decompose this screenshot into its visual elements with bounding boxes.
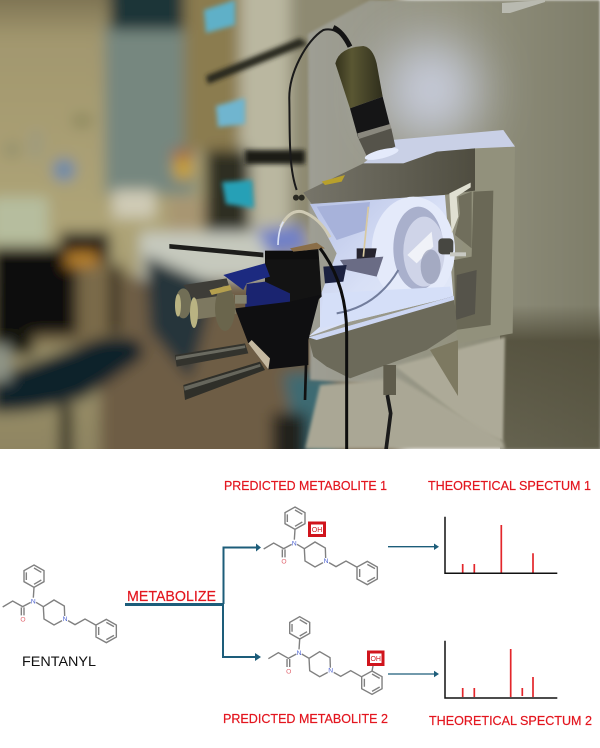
sticker on top of panel bbox=[502, 0, 545, 13]
molecule: predicted metabolite 1 bbox=[264, 507, 377, 585]
molecule: predicted metabolite 2 bbox=[268, 617, 382, 694]
molecule: fentanyl: O bbox=[20, 617, 26, 624]
molecule: predicted metabolite 2: N bbox=[328, 668, 333, 675]
heading: theoretical spectrum 1: THEORETICAL SPECTUM 1 bbox=[428, 479, 591, 493]
callout: OH group on metabolite 1 bbox=[310, 523, 324, 536]
callout: OH group on metabolite 2 bbox=[368, 652, 383, 664]
side latch and bracket bbox=[454, 191, 493, 330]
adjustment knobs bbox=[184, 278, 229, 299]
molecule: predicted metabolite 1: O bbox=[281, 559, 287, 566]
rods below stage bbox=[175, 343, 248, 367]
camera cable bbox=[289, 29, 350, 190]
arrow: metabolite 2 to spectrum 2 bbox=[388, 671, 439, 677]
arrow: metabolize branching to both metabolites bbox=[125, 544, 261, 661]
chart: theoretical spectrum 1 bbox=[445, 517, 557, 573]
housing back plate bbox=[458, 148, 513, 341]
molecule: predicted metabolite 1: N bbox=[292, 540, 297, 547]
molecule: fentanyl: N bbox=[31, 598, 36, 605]
heading: theoretical spectrum 2: THEORETICAL SPECTUM 2 bbox=[429, 714, 592, 728]
inlet rod bbox=[169, 244, 263, 257]
black positioning stage bbox=[265, 249, 322, 302]
molecule: fentanyl: N bbox=[63, 616, 68, 623]
connector under housing bbox=[383, 365, 396, 395]
ion source housing, drawn at 3x bbox=[169, 27, 515, 450]
molecule: fentanyl bbox=[3, 565, 116, 643]
inlet stage inside the window bbox=[356, 248, 377, 259]
lower housing bbox=[308, 296, 457, 378]
housing top hood bbox=[363, 130, 515, 163]
heading: predicted metabolite 2: PREDICTED METABOLITE 2 bbox=[223, 712, 388, 726]
viewing window interior bbox=[308, 195, 453, 337]
photo: mass spectrometer ion source with camera in a laboratory bbox=[0, 0, 600, 470]
molecule: predicted metabolite 2: O bbox=[286, 668, 291, 675]
molecule: predicted metabolite 2: N bbox=[297, 650, 302, 657]
instrument front panel bbox=[308, 0, 600, 449]
arrow: metabolite 1 to spectrum 1 bbox=[388, 544, 439, 550]
lower white panel below the source bbox=[395, 337, 505, 441]
USB microscope camera bbox=[335, 46, 400, 162]
callout: OH group on metabolite 1: OH bbox=[312, 527, 322, 534]
blurred instrument screens bbox=[204, 0, 308, 208]
label: metabolize: METABOLIZE bbox=[127, 589, 216, 605]
molecule: predicted metabolite 1: N bbox=[324, 558, 329, 565]
blurred laboratory background bbox=[0, 0, 400, 470]
chart: theoretical spectrum 2 bbox=[445, 641, 557, 698]
heading: predicted metabolite 1: PREDICTED METABOLITE 1 bbox=[224, 479, 387, 493]
window arc and hinge bbox=[281, 211, 330, 237]
light glow on panel bbox=[384, 40, 480, 140]
label: fentanyl: FENTANYL bbox=[22, 653, 96, 669]
thin cables bbox=[320, 248, 347, 450]
diagram area background bbox=[0, 449, 600, 748]
callout: OH group on metabolite 2: OH bbox=[370, 656, 381, 663]
